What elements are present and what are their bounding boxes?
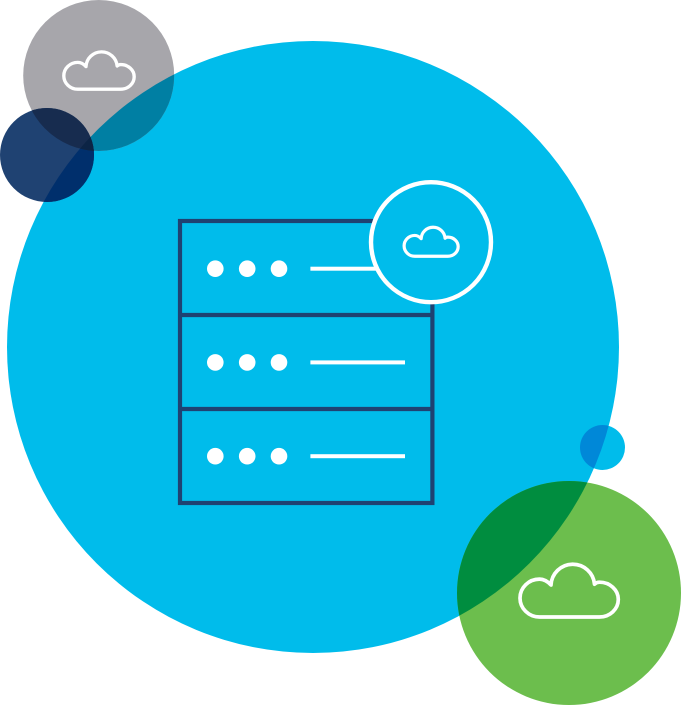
navy circle: [0, 108, 94, 202]
icon: gray circle cloud: [64, 52, 134, 89]
green circle with cloud: [457, 481, 681, 705]
server rack: [178, 221, 434, 503]
server unit 3 indicators: [207, 448, 405, 465]
icon: green circle cloud: [520, 564, 618, 617]
server unit 1 indicators: [207, 260, 405, 277]
outlined circle with cloud: [371, 182, 491, 302]
large blue circle: [7, 41, 619, 653]
icon: small cloud: [404, 227, 458, 256]
gray circle with cloud: [23, 0, 174, 151]
server unit 2 indicators: [207, 354, 405, 371]
small blue accent circle: [580, 425, 625, 470]
rack frame: [178, 221, 434, 503]
